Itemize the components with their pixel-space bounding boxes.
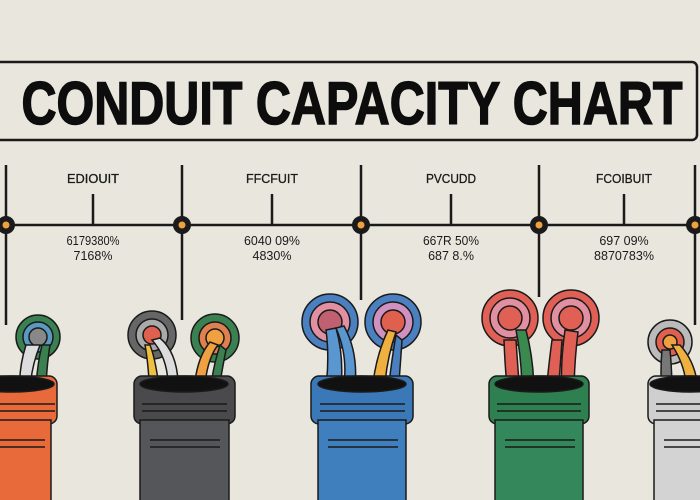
labels: FFCFUIT [246, 171, 298, 186]
conduit: silver [648, 320, 700, 500]
percentages [66, 234, 654, 263]
conduit: gray [128, 311, 239, 500]
conduit: blue [302, 294, 421, 500]
percentages: 6040 09% [244, 234, 300, 248]
timeline dots [0, 216, 700, 234]
labels: PVCUDD [426, 171, 476, 186]
percentages: 7168% [74, 249, 112, 263]
conduit: orange [0, 315, 60, 500]
labels: FCOIBUIT [596, 171, 652, 186]
percentages: 8870783% [594, 249, 654, 263]
percentages: 687 8.% [428, 249, 474, 263]
conduit: green [482, 290, 599, 500]
percentages: 697 09% [599, 234, 649, 248]
timeline [0, 165, 700, 325]
percentages: 6179380% [66, 234, 120, 248]
labels: EDIOUIT [67, 171, 119, 186]
labels [67, 171, 652, 186]
percentages: 667R 50% [423, 234, 479, 248]
percentages: 4830% [253, 249, 291, 263]
